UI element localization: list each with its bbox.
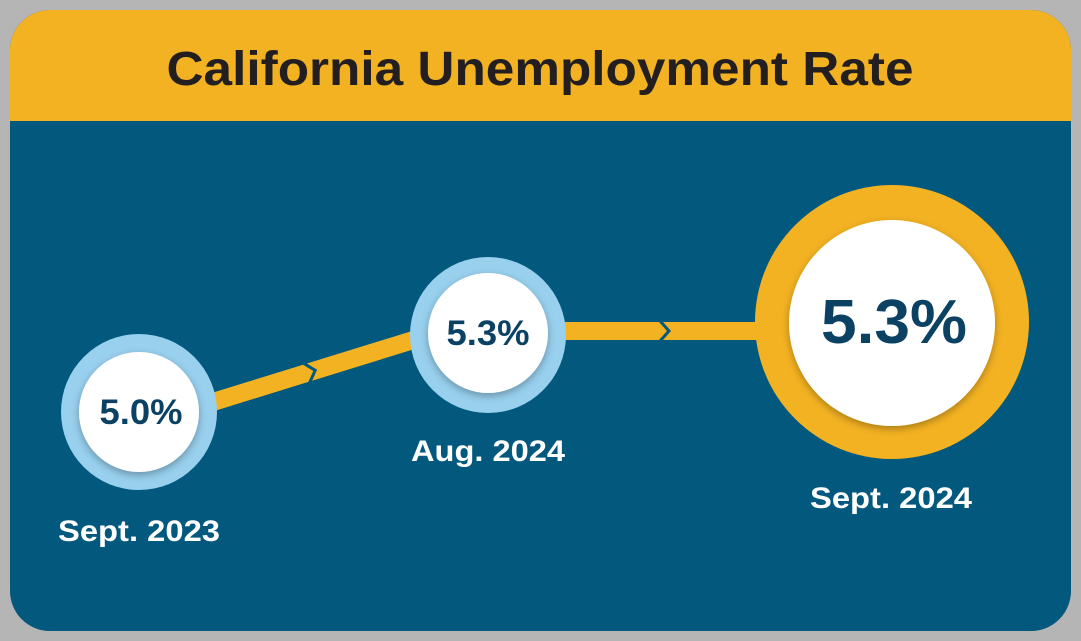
title: California Unemployment Rate [166,43,914,96]
arrow: connector 2 [563,322,763,340]
marker: Aug. 2024 [410,257,566,413]
marker: Sept. 2023 [61,334,217,490]
label: Aug. 2024: Aug. 2024 [411,435,565,468]
marker: Sept. 2023: 5.0% [100,393,182,432]
label: Sept. 2023: Sept. 2023 [58,515,220,548]
header bar [10,10,1071,121]
arrow: connector 1 [210,331,418,411]
marker: Sept. 2024: 5.3% [821,288,967,357]
marker: Sept. 2024 [755,185,1029,459]
marker: Aug. 2024: 5.3% [446,314,530,353]
label: Sept. 2024: Sept. 2024 [810,482,972,515]
